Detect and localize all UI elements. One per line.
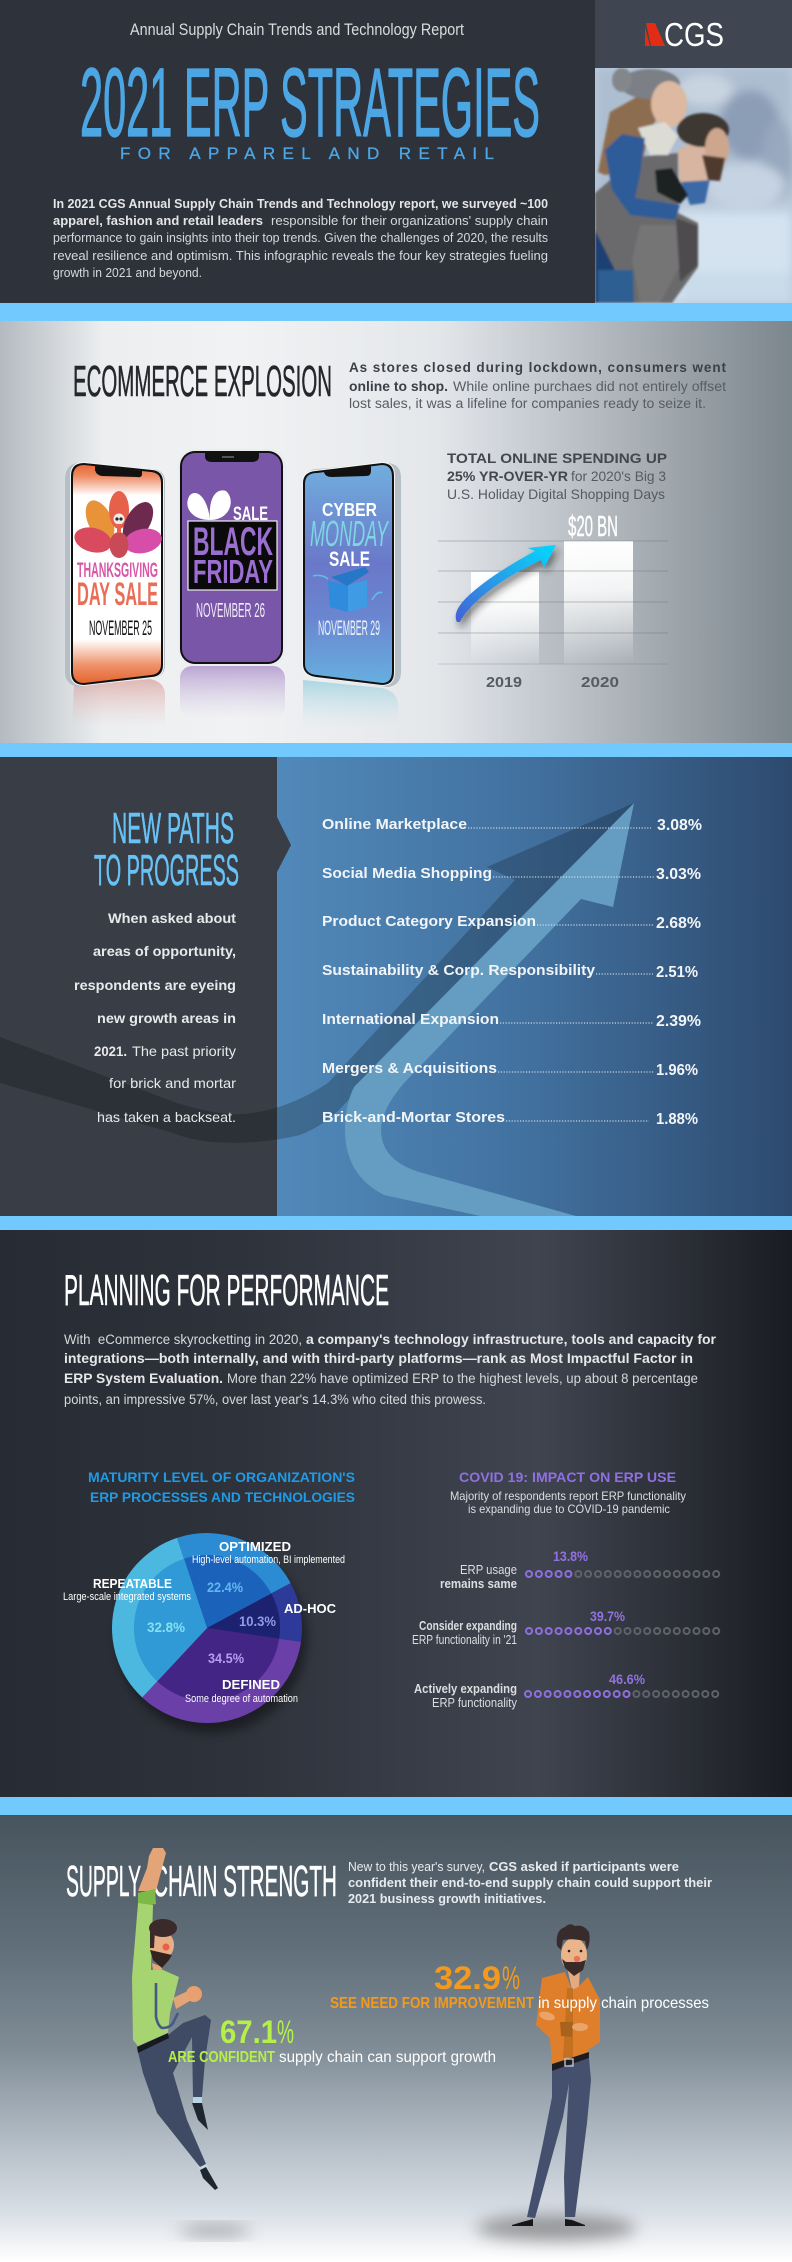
intro text block: growth in 2021 and beyond.: [53, 265, 202, 280]
title sub-line: FOR APPAREL AND RETAIL: [120, 144, 494, 163]
logo panel: [595, 0, 792, 68]
phone: cyber monday: MONDAY: [310, 513, 389, 554]
description text: integrations—both internally, and with third-party platforms—rank as Most Impactful Factor in: [64, 1351, 693, 1366]
phone: thanksgiving: [65, 462, 165, 687]
heading: [94, 804, 239, 895]
shadows under figures: [179, 2215, 636, 2241]
panel: ecommerce explosion: [0, 321, 792, 743]
spending text: for 2020's Big 3: [571, 468, 666, 484]
intro text block: responsible for their organizations' supply chain: [271, 213, 548, 228]
phone: cyber monday: [302, 462, 401, 687]
intro text block: In 2021 CGS Annual Supply Chain Trends and Technology report, we surveyed ~100: [53, 196, 548, 211]
bar: 2019: [471, 572, 539, 662]
description text: While online purchaes did not entirely offset: [453, 379, 726, 394]
description text: confident their end-to-end supply chain could support their: [348, 1875, 712, 1890]
ranked growth areas list: Mergers & Acquisitions: [322, 1060, 497, 1077]
icon: gift bow: [187, 490, 231, 520]
growth arrow: [456, 545, 556, 622]
side text block: for brick and mortar: [109, 1075, 236, 1091]
stat: 67.1%: %: [277, 2014, 294, 2050]
pie chart: maturity level: Large-scale integrated systems: [63, 1591, 191, 1603]
chart heading: covid 19 impact: [450, 1469, 686, 1516]
pie chart: maturity level: OPTIMIZED: [219, 1539, 291, 1554]
chart heading: maturity: [88, 1469, 355, 1505]
stat: 32.9%: %: [502, 1960, 520, 1996]
row: actively expanding: ERP functionality: [432, 1696, 518, 1710]
phone: cyber monday: SALE: [329, 548, 370, 571]
stat: 32.9%: [330, 1960, 709, 2012]
pie chart: maturity level: 22.4%: [207, 1579, 243, 1595]
row: remains same: remains same: [440, 1577, 517, 1591]
pie chart: maturity level: High-level automation, BI implemented: [192, 1554, 345, 1566]
row: consider expanding: Consider expanding: [419, 1619, 517, 1633]
side text block: The past priority: [132, 1043, 236, 1059]
intro text block: reveal resilience and optimism. This infographic reveals the four key strategies fueling: [53, 248, 548, 263]
panel: new paths to progress: NEW PATHS: [112, 804, 234, 853]
phone: thanksgiving: DAY SALE: [77, 576, 158, 612]
row: consider expanding: ERP functionality in '21: [412, 1633, 517, 1647]
figure: standing man: [512, 1924, 600, 2226]
row: actively expanding: 46.6%: [609, 1671, 645, 1687]
stat: 32.9%: in supply chain processes: [538, 1995, 709, 2012]
arrow: light growth path: [345, 803, 634, 1216]
description text: New to this year's survey,: [348, 1859, 485, 1874]
row: consider expanding: [412, 1608, 719, 1647]
spending text: 25% YR-OVER-YR: [447, 468, 568, 484]
description text: ERP System Evaluation.: [64, 1371, 223, 1386]
ranked growth areas list: 2.68%: [656, 915, 701, 932]
phone: cyber monday: NOVEMBER 29: [318, 617, 380, 640]
figure: jumping man: [132, 1848, 218, 2190]
row: remains same: 13.8%: [553, 1548, 588, 1564]
row: consider expanding: 39.7%: [590, 1608, 625, 1624]
ranked growth areas list: Social Media Shopping: [322, 865, 492, 882]
bar chart: online spending: 2019: [486, 675, 522, 691]
pie chart: maturity level: DEFINED: [222, 1677, 280, 1692]
panel: ecommerce explosion: ECOMMERCE EXPLOSION: [73, 357, 332, 406]
logo panel: CGS: [664, 16, 724, 53]
accent band: [0, 743, 792, 757]
heading: [66, 1857, 337, 1906]
ranked growth areas list: 2.39%: [656, 1013, 701, 1030]
spending text: U.S. Holiday Digital Shopping Days: [447, 486, 665, 502]
ranked growth areas list: Product Category Expansion: [322, 913, 536, 930]
row: remains same: [440, 1548, 719, 1591]
description text: [348, 1859, 712, 1906]
row: actively expanding: [414, 1671, 718, 1710]
stat: 67.1%: 67.1: [220, 2014, 277, 2050]
ranked growth areas list: Sustainability & Corp. Responsibility: [322, 962, 596, 979]
dot chart: erp use: [412, 1548, 719, 1710]
phone: black friday: NOVEMBER 26: [196, 600, 265, 622]
ranked growth areas list: 3.08%: [657, 817, 702, 834]
description text: points, an impressive 57%, over last year's 14.3% who cited this prowess.: [64, 1392, 486, 1407]
ranked growth areas list: 1.88%: [656, 1111, 698, 1128]
ranked growth areas list: 3.03%: [656, 866, 701, 883]
chart heading: covid 19 impact: Majority of respondents report ERP functionality: [450, 1489, 686, 1503]
chart heading: covid 19 impact: COVID 19: IMPACT ON ERP USE: [459, 1469, 676, 1485]
panel: planning for performance: [0, 1230, 792, 1797]
description text: [349, 360, 726, 411]
description text: CGS asked if participants were: [489, 1859, 679, 1874]
side text block: has taken a backseat.: [97, 1109, 236, 1125]
pie chart: maturity level: [63, 1533, 345, 1733]
side text block: [74, 910, 236, 1125]
ranked growth areas list: Online Marketplace: [322, 816, 467, 833]
side text block: areas of opportunity,: [93, 943, 236, 959]
panel: new paths to progress: [0, 757, 792, 1216]
ranked growth areas list: 2.51%: [656, 964, 698, 981]
stat: 67.1%: [168, 2014, 496, 2066]
bar chart: online spending: $20 BN: [568, 511, 618, 543]
icon: gift box: [313, 567, 382, 612]
panel: planning for performance: PLANNING FOR PERFORMANCE: [64, 1266, 389, 1315]
pie chart: maturity level: REPEATABLE: [93, 1576, 172, 1591]
photo: couple in the snow: [595, 68, 792, 303]
panel: header: [0, 0, 792, 303]
accent band: [0, 1797, 792, 1815]
panel: new paths to progress: TO PROGRESS: [94, 846, 239, 895]
heading: SUPPLY: [66, 1857, 141, 1906]
description text: As stores closed during lockdown, consumers went: [349, 360, 726, 375]
description text: a company's technology infrastructure, tools and capacity for: [306, 1332, 717, 1347]
bar chart: online spending: 2020: [581, 675, 619, 691]
arrow: dark growth path: [0, 803, 634, 1143]
phone: black friday: BLACK: [193, 520, 273, 564]
spending text: TOTAL ONLINE SPENDING UP: [447, 450, 667, 466]
phone: thanksgiving: NOVEMBER 25: [89, 617, 152, 640]
side text block: respondents are eyeing: [74, 977, 236, 993]
ranked growth areas list: [322, 816, 702, 1128]
panel: supply chain strength: CHAIN STRENGTH: [153, 1857, 337, 1906]
panel: supply chain strength: [0, 1815, 792, 2262]
accent band: [0, 1216, 792, 1230]
description text: With eCommerce skyrocketting in 2020,: [64, 1332, 302, 1347]
bar chart: online spending: [438, 511, 668, 691]
phone reflections: [72, 666, 398, 727]
intro text block: performance to gain insights into their top trends. Given the challenges of 2020, the results: [53, 230, 548, 245]
pie chart: maturity level: Some degree of automation: [185, 1693, 298, 1705]
pie chart: maturity level: AD-HOC: [284, 1601, 337, 1616]
pie chart: maturity level: 32.8%: [147, 1619, 186, 1635]
phone: black friday: [178, 449, 286, 666]
phone: black friday: SALE: [233, 504, 268, 525]
stat: 67.1%: ARE CONFIDENT: [168, 2049, 275, 2066]
pie chart: maturity level: 10.3%: [239, 1613, 277, 1629]
side text block: 2021.: [94, 1043, 127, 1059]
phone: thanksgiving: THANKSGIVING: [77, 559, 158, 582]
stat: 67.1%: supply chain can support growth: [279, 2049, 496, 2066]
phone: cyber monday: CYBER: [322, 500, 377, 520]
pie chart: maturity level: 34.5%: [208, 1650, 244, 1666]
chart heading: maturity: ERP PROCESSES AND TECHNOLOGIES: [90, 1489, 355, 1505]
description text: 2021 business growth initiatives.: [348, 1891, 546, 1906]
stat: 32.9%: 32.9: [434, 1960, 501, 1996]
ranked growth areas list: 1.96%: [656, 1062, 698, 1079]
side text block: When asked about: [108, 910, 236, 926]
description text: More than 22% have optimized ERP to the highest levels, up about 8 percentage: [227, 1371, 698, 1386]
row: actively expanding: Actively expanding: [414, 1682, 517, 1696]
accent band: [0, 303, 792, 321]
icon: turkey: [72, 491, 164, 558]
row: remains same: ERP usage: [460, 1563, 517, 1577]
spending text: [447, 450, 667, 502]
chart heading: maturity: MATURITY LEVEL OF ORGANIZATION'S: [88, 1469, 355, 1485]
report subtitle: Annual Supply Chain Trends and Technology Report: [130, 20, 464, 39]
description text: online to shop.: [349, 379, 448, 394]
intro text block: [53, 196, 548, 280]
ranked growth areas list: Brick-and-Mortar Stores: [322, 1109, 505, 1126]
phone: black friday: FRIDAY: [193, 553, 273, 590]
intro text block: apparel, fashion and retail leaders: [53, 213, 263, 228]
stat: 32.9%: SEE NEED FOR IMPROVEMENT: [330, 1995, 534, 2012]
side text block: new growth areas in: [97, 1010, 236, 1026]
ranked growth areas list: International Expansion: [322, 1011, 499, 1028]
bar: 2020: [564, 541, 633, 662]
description text: [64, 1332, 717, 1407]
description text: lost sales, it was a lifeline for companies ready to seize it.: [349, 396, 706, 411]
chart heading: covid 19 impact: is expanding due to COVID-19 pandemic: [468, 1502, 670, 1516]
